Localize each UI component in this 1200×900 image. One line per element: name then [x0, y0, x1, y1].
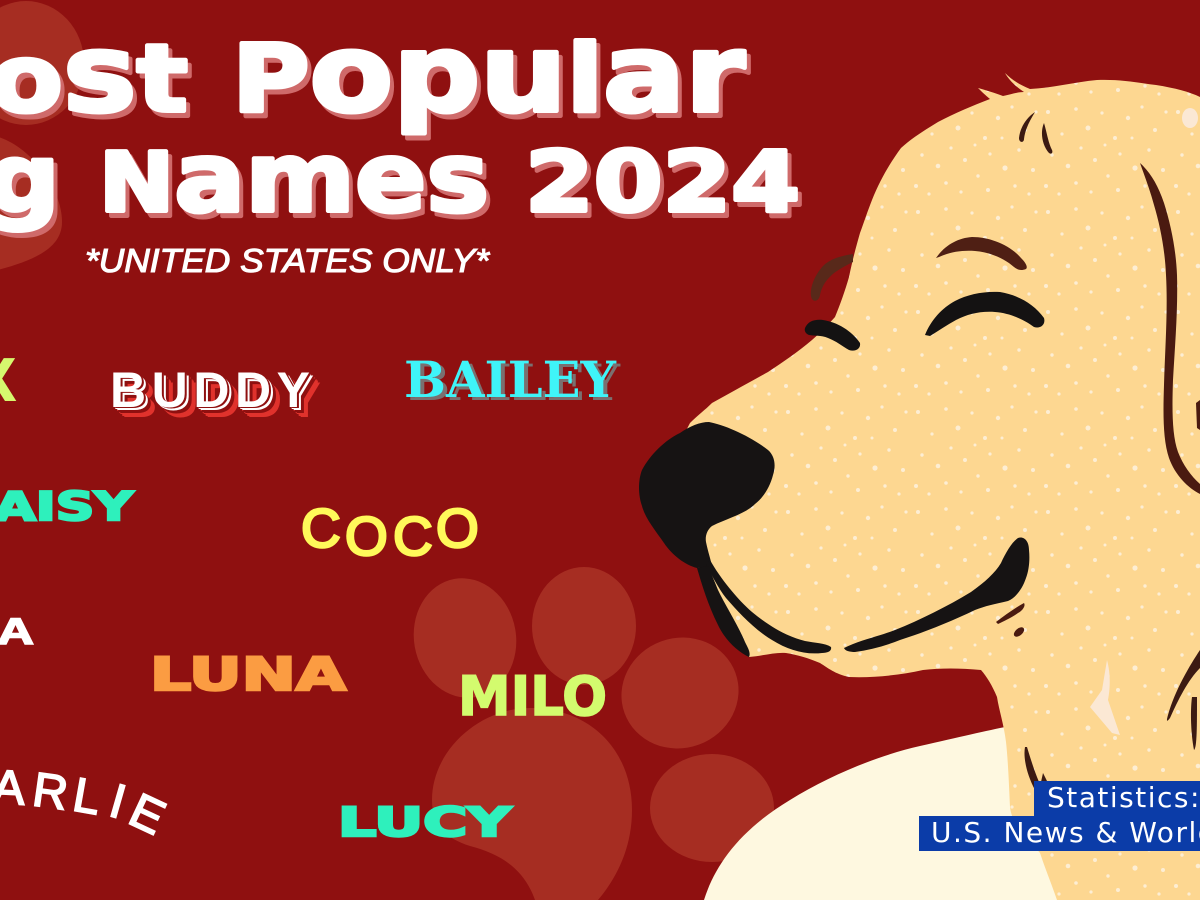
credit background — [919, 781, 1200, 851]
smile — [844, 538, 1029, 652]
lower lip line — [697, 566, 750, 657]
ear fold mark — [1196, 400, 1200, 430]
name: Coco: COCO — [301, 497, 479, 567]
near eyebrow — [811, 254, 853, 301]
cheek marks — [996, 603, 1026, 639]
dog chest — [704, 726, 1060, 900]
near closed eye — [805, 320, 860, 351]
lower fur marks — [1024, 650, 1200, 790]
dog illustration — [639, 73, 1200, 900]
upper lip line — [706, 560, 831, 653]
nose — [639, 422, 775, 568]
name: Lucy: LUCY — [338, 800, 513, 846]
paw print: bottom centre — [404, 567, 774, 900]
source credit — [919, 781, 1200, 851]
fur highlights — [1090, 108, 1198, 735]
title line 1 word 2: Popu lar — [232, 12, 745, 137]
title line 2 year: 2024 — [525, 133, 800, 231]
title — [0, 12, 800, 234]
name: Luna: LUNA — [150, 648, 346, 701]
subtitle: *UNITED STATES ONLY* — [85, 242, 490, 279]
name: Buddy: BUDDY — [110, 362, 310, 418]
credit line 1: Statistics: — [1047, 781, 1200, 814]
name: Bailey: BAILEY — [404, 350, 617, 409]
dog head and neck — [650, 73, 1200, 900]
name: Milo: MILO — [458, 665, 607, 728]
far closed eye — [925, 292, 1044, 336]
title line 2 word 2: Names — [99, 122, 489, 234]
forehead wrinkles — [1019, 112, 1052, 154]
far eyebrow — [936, 237, 1027, 270]
paw print: top left — [0, 1, 84, 272]
ear line — [1140, 163, 1200, 494]
